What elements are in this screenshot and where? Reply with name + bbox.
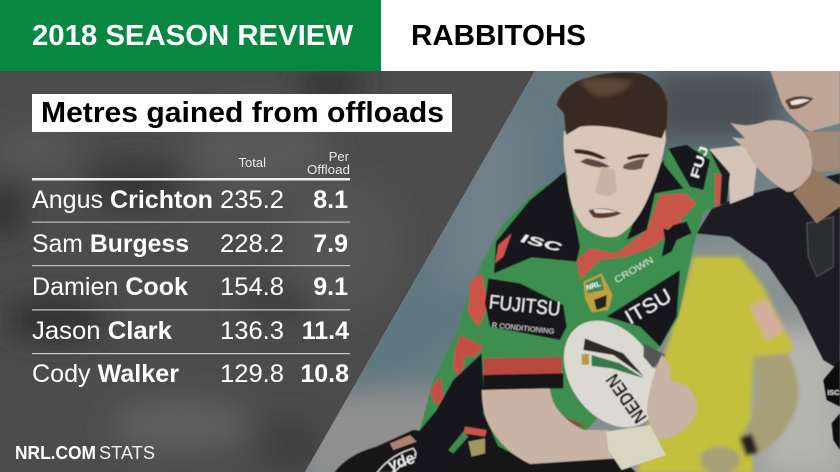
referee in yellow [637, 257, 799, 472]
row: Angus Crichton: 8.1 [313, 186, 348, 214]
column headers: Total [239, 155, 266, 170]
row: Sam Burgess: 228.2 [220, 230, 284, 258]
opponent player [697, 70, 840, 450]
jersey black chest band [607, 270, 680, 347]
photo panel: player with ball: CROWN [613, 255, 655, 285]
footer logo: NRL.COM STATS: STATS [99, 443, 155, 463]
NRL badge [583, 273, 613, 312]
row: Damien Cook [32, 273, 348, 301]
player arm [482, 388, 617, 464]
player near arm [707, 145, 757, 204]
row: Damien Cook: 9.1 [313, 273, 348, 301]
row: Angus Crichton: 235.2 [220, 186, 284, 214]
column headers [239, 149, 350, 177]
rugby ball: NEDEN [603, 369, 651, 427]
opponent player: ISC [827, 388, 840, 397]
row: Cody Walker: Cody Walker [32, 360, 179, 388]
header: green title bar: 2018 SEASON REVIEW [32, 20, 354, 52]
player head [563, 113, 666, 237]
header: team name [381, 0, 840, 71]
jersey collar [626, 160, 666, 240]
left dark panel [0, 69, 540, 472]
rugby ball [563, 320, 666, 428]
jersey green base [420, 147, 730, 472]
row: Jason Clark: 136.3 [220, 317, 284, 345]
row: Sam Burgess: 7.9 [313, 230, 348, 258]
row: Sam Burgess [32, 230, 348, 258]
opponent arm [802, 131, 840, 172]
opponent face [770, 70, 840, 132]
row: Angus Crichton [32, 186, 348, 214]
NRL badge: NRL [585, 279, 602, 292]
footer logo: NRL.COM STATS: NRL.COM [15, 443, 96, 463]
header: green title bar [0, 0, 381, 71]
table: metres from offloads [32, 149, 350, 388]
row: Damien Cook: 154.8 [220, 273, 284, 301]
row: Jason Clark: 11.4 [302, 317, 349, 345]
sponsor text: ISC [519, 231, 564, 255]
column headers: Offload [307, 162, 350, 177]
row: Cody Walker [32, 360, 349, 388]
wrist tape [606, 425, 666, 470]
shorts badge [468, 438, 485, 457]
row: Angus Crichton: Angus Crichton [32, 186, 213, 214]
photo panel: player with ball: ITSU [621, 284, 676, 329]
rabbit logo [662, 222, 692, 257]
opponent hand [730, 120, 812, 192]
row: Jason Clark [32, 317, 349, 345]
jersey shoulder sponsor patch [668, 145, 710, 190]
row: Damien Cook: Damien Cook [32, 273, 188, 301]
jersey red chest band [577, 193, 697, 280]
chart title: Metres gained from offloads [41, 97, 444, 129]
row: Jason Clark: Jason Clark [32, 317, 172, 345]
jersey black yoke [494, 172, 580, 273]
photo panel: player with ball: FUJITSU [488, 291, 561, 321]
row: Sam Burgess: Sam Burgess [32, 230, 189, 258]
photo panel: player with ball [300, 70, 840, 472]
column headers: Per [329, 149, 350, 164]
row: Cody Walker: 129.8 [220, 360, 284, 388]
footer logo: NRL.COM STATS [15, 443, 155, 463]
photo panel: player with ball: R CONDITIONING [491, 320, 555, 336]
header: team name: RABBITOHS [411, 20, 586, 52]
row: Cody Walker: 10.8 [300, 360, 349, 388]
photo panel: player with ball: FUJ [688, 144, 711, 180]
player hair [557, 72, 667, 138]
jersey sleeve sponsor patch [485, 278, 567, 340]
shorts and boot [334, 430, 637, 472]
jersey lower black side [415, 353, 498, 463]
jersey red sleeve stripes [468, 273, 488, 327]
player hand [647, 355, 697, 440]
